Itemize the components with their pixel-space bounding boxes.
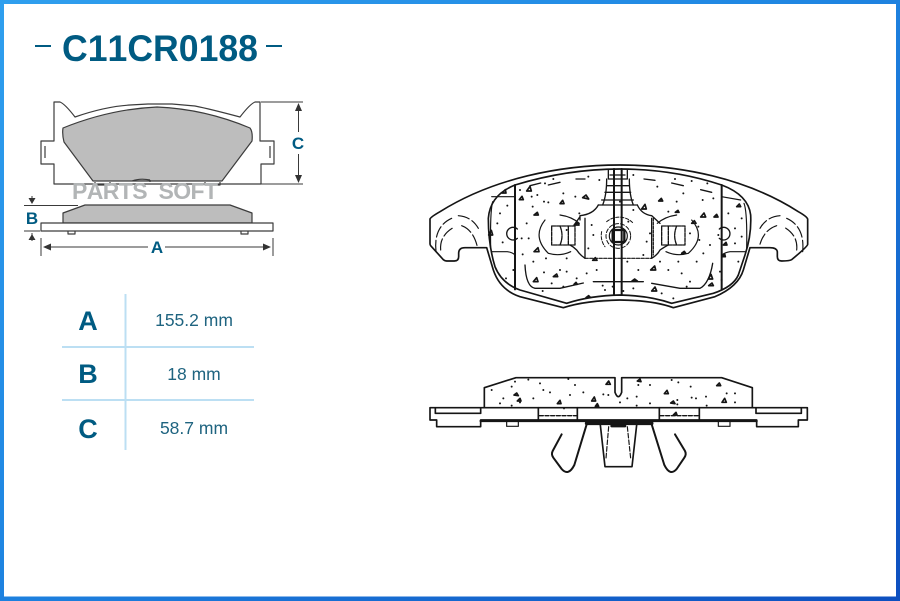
plate recesses [538,408,699,420]
backing plate [430,408,807,427]
dimension A: A [151,238,163,257]
small diagram: front view of pad [41,102,274,185]
large pad drawing: front view [430,165,808,308]
small diagram: side view of pad [41,205,273,234]
large pad drawing: side view [430,378,807,472]
dimension A [41,238,273,257]
speckles: triangles [514,379,726,415]
ear details [436,216,478,252]
dimension table: 18 mm [167,364,221,384]
top clip [598,170,637,205]
dimension table: A [78,306,98,336]
speckles: dots [497,175,742,298]
dimension table: C [78,414,98,444]
dimension table: B [78,359,98,389]
left piston [552,226,575,245]
speckles: dots [492,379,735,408]
watermark: PARTS SOFT [72,178,218,204]
speckles: triangles [489,186,741,298]
dimension table: 155.2 mm [155,310,233,330]
dimension C [261,102,304,184]
dimension B [24,196,78,241]
title: C11CR0188 [62,28,258,69]
dimension table [62,294,254,450]
dimension B: B [26,209,38,228]
center plate [574,205,660,258]
center hub [613,230,624,242]
dimension C: C [292,134,304,153]
pad edge details [491,197,747,255]
side holes [507,227,730,240]
spring clips [552,424,587,472]
slot and vertical section lines [515,185,722,289]
friction block outline [488,169,751,303]
dimension table: 58.7 mm [160,418,228,438]
friction block [484,378,752,408]
right piston [662,226,685,245]
center tab [600,425,637,467]
backing plate outline [430,165,808,308]
